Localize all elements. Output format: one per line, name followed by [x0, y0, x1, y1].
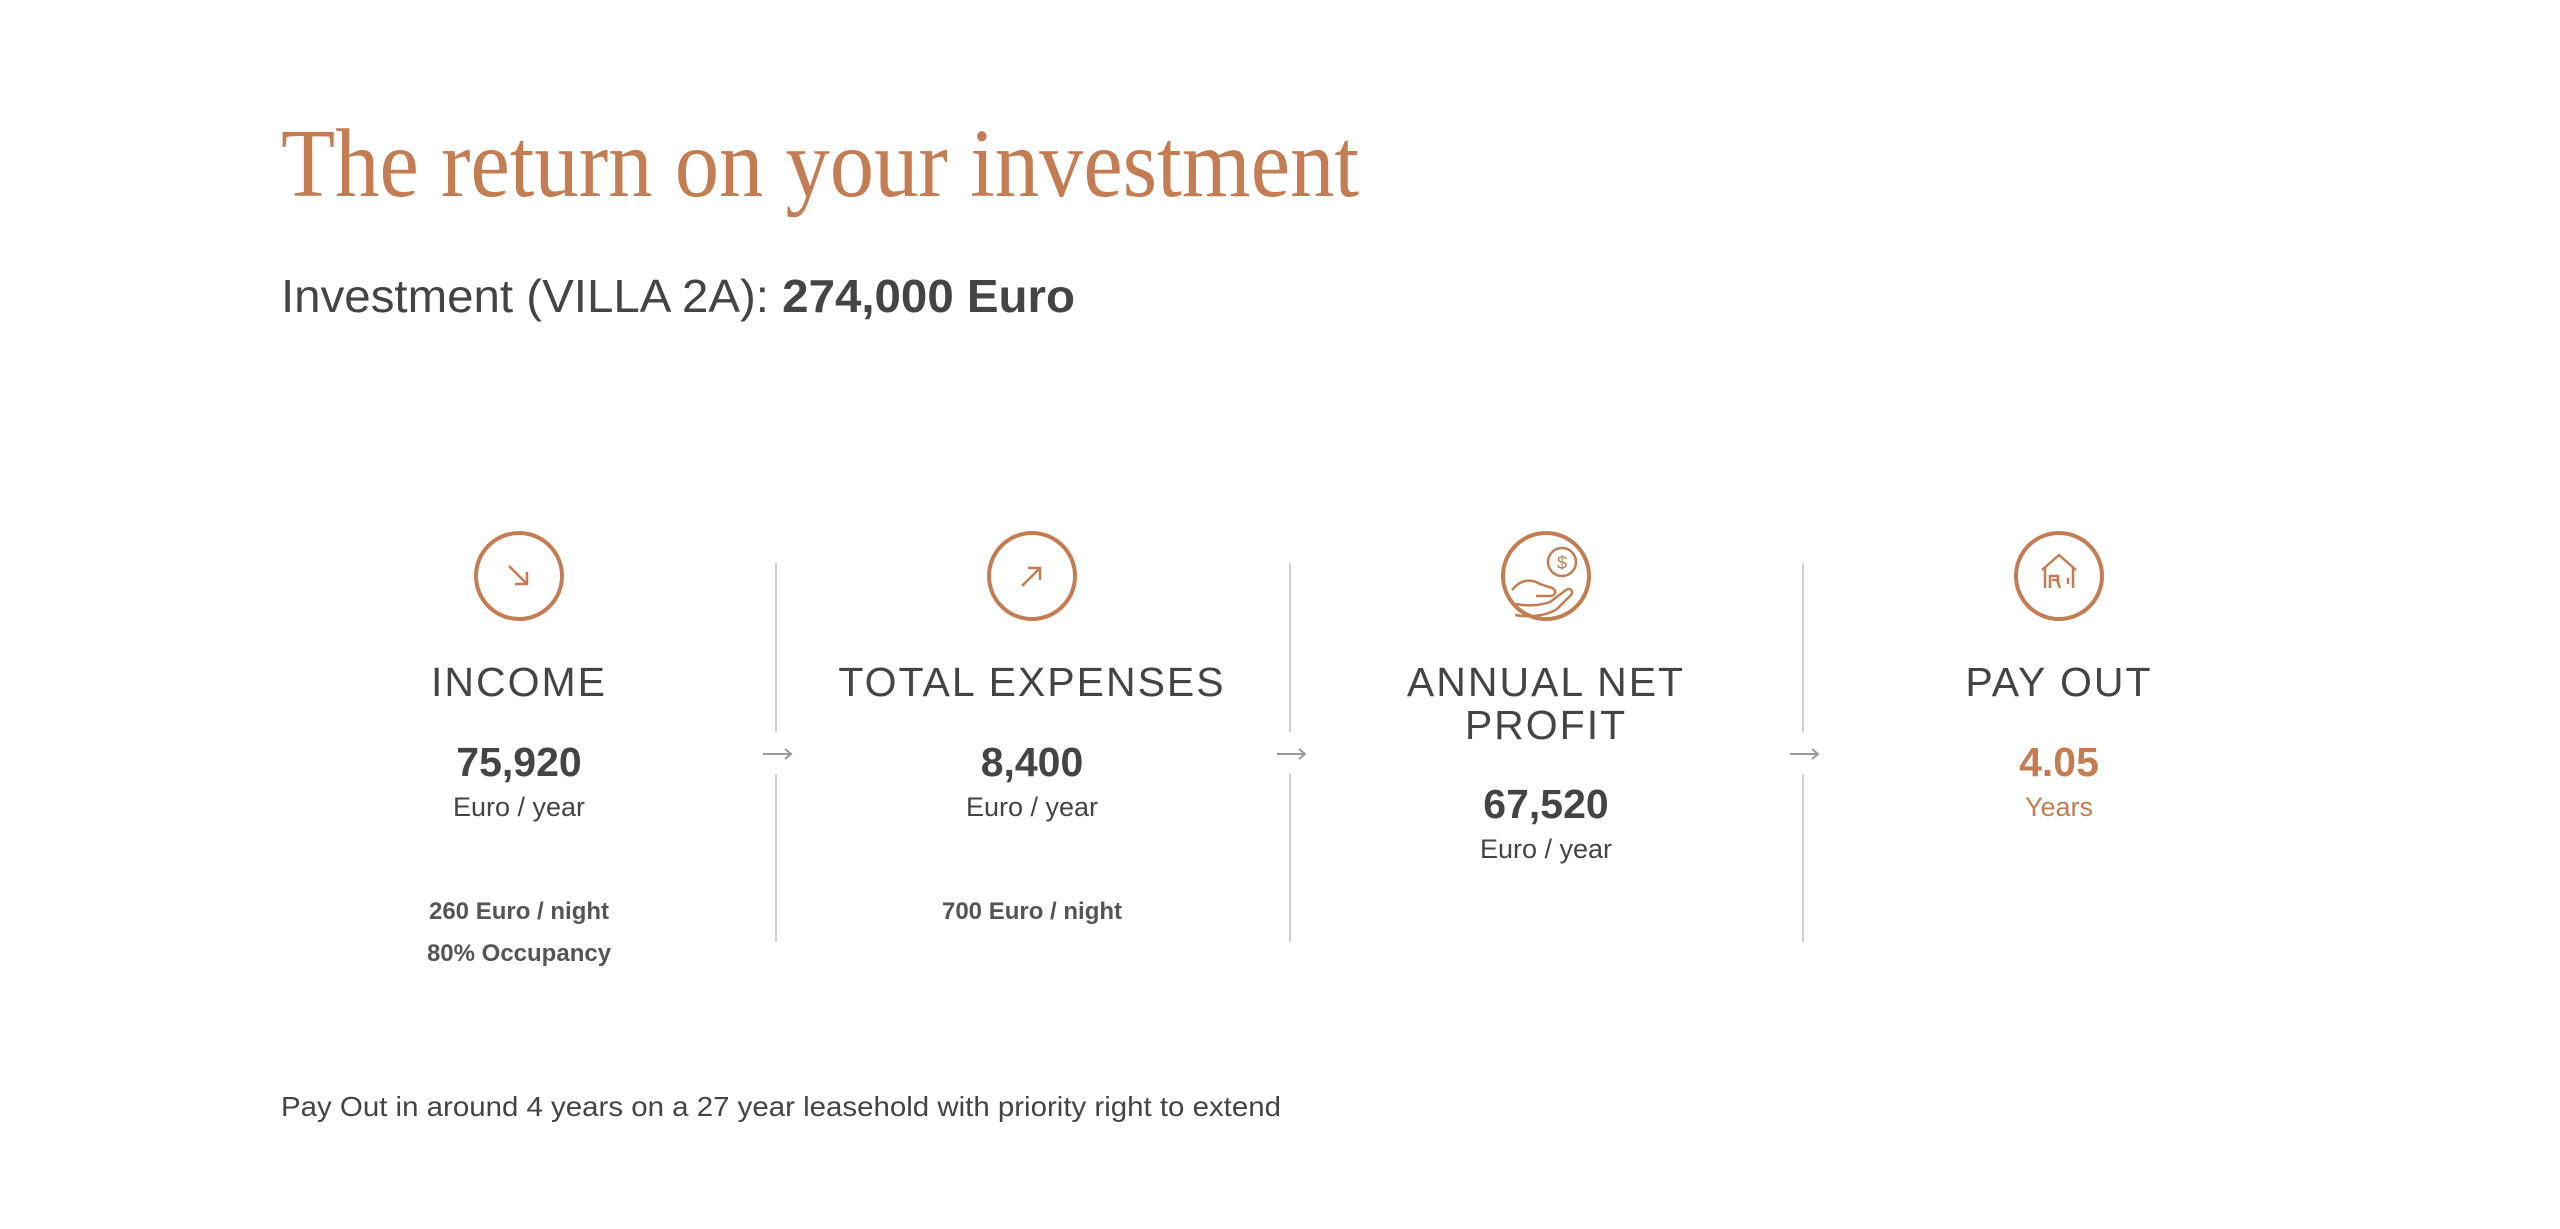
panel: annual net profit: PROFIT	[1465, 702, 1627, 748]
panel: income: INCOME	[431, 659, 607, 705]
panel: annual net profit: ANNUAL NET	[1407, 659, 1685, 705]
icon: hand with coin: $	[1557, 553, 1567, 573]
panel: total expenses: TOTAL EXPENSES	[838, 659, 1226, 705]
footer note: Pay Out in around 4 years on a 27 year leasehold with priority right to extend	[281, 1091, 1281, 1122]
panel: annual net profit	[1407, 533, 1685, 864]
arrow: income to expenses	[763, 749, 791, 759]
panel: annual net profit: 67,520	[1483, 781, 1609, 827]
title: The return on your investment	[281, 110, 1359, 218]
arrow: profit to payout	[1790, 749, 1818, 759]
panel: income: 80% Occupancy	[427, 940, 612, 967]
panel: pay out	[1965, 533, 2153, 822]
icon: arrow up-right	[989, 533, 1075, 619]
panel: income: 260 Euro / night	[429, 898, 609, 925]
icon: arrow down-right	[476, 533, 562, 619]
panel: total expenses: Euro / year	[966, 792, 1098, 822]
panel: pay out: 4.05	[2019, 739, 2099, 785]
dividers with arrows	[776, 563, 1803, 942]
panel: total expenses: 700 Euro / night	[942, 898, 1122, 925]
panel: pay out: Years	[2025, 792, 2093, 822]
panel: total expenses	[838, 533, 1226, 925]
arrow: expenses to profit	[1277, 749, 1305, 759]
panel: total expenses: 8,400	[981, 739, 1083, 785]
panel: income: 75,920	[456, 739, 582, 785]
icon: hand with coin	[1503, 533, 1589, 619]
icon: house	[2016, 533, 2102, 619]
panel: pay out: PAY OUT	[1965, 659, 2153, 705]
panel: income: Euro / year	[453, 792, 585, 822]
panel: annual net profit: Euro / year	[1480, 834, 1612, 864]
panel: income	[427, 533, 612, 967]
subtitle: investment: Investment (VILLA 2A): 274,000 Euro	[281, 270, 1075, 322]
